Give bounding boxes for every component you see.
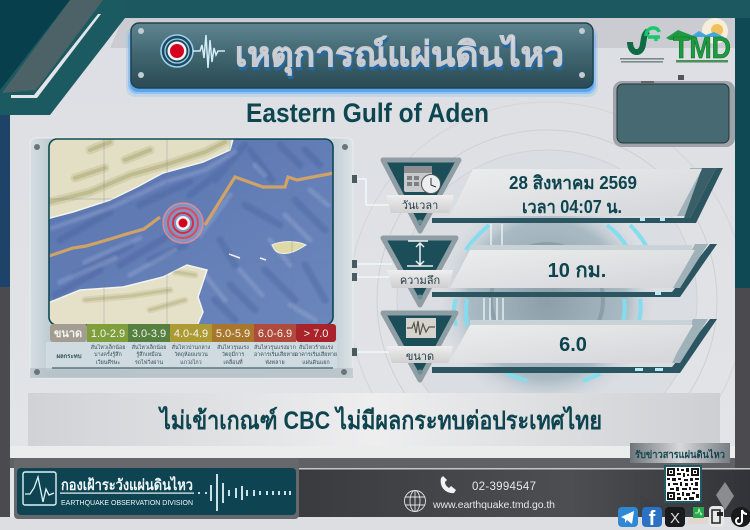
magnitude legend effects row: รู้สึกเหมือน: [136, 351, 162, 358]
panel: map glass frame: [30, 138, 353, 378]
magnitude legend colour row: 3.0-3.9: [132, 328, 166, 340]
magnitude legend colour row: [50, 324, 336, 342]
title plate: [126, 23, 598, 97]
icon: chart app: [688, 507, 708, 524]
icon: X: X: [670, 510, 680, 527]
date and time text: [509, 173, 637, 217]
sea floor relief: [52, 145, 328, 320]
epicentre marker: [163, 203, 203, 243]
magnitude legend effects row: สั่นไหวปานกลาง: [172, 343, 211, 351]
magnitude legend effects row: แผ่นดินแยก: [302, 359, 330, 366]
magnitude legend effects row: [52, 343, 337, 368]
magnitude value: 6.0: [559, 334, 587, 356]
icon: telegram: [618, 507, 638, 527]
northern coast relief: [50, 142, 225, 202]
magnitude legend effects row: แกว่งไกว: [180, 359, 202, 366]
info row: magnitude: [383, 313, 717, 380]
earthquake news label: รับข่าวสารแผ่นดินไหว: [635, 448, 725, 461]
magnitude legend colour row: > 7.0: [304, 328, 328, 340]
icon: globe: [404, 490, 426, 512]
magnitude legend effects row: บางครั้งรู้สึก: [94, 350, 122, 358]
contact details: [404, 476, 555, 512]
magnitude legend colour row: 6.0-6.9: [258, 328, 292, 340]
division name: EARTHQUAKE OBSERVATION DIVISION: [61, 498, 193, 507]
location heading: Eastern Gulf of Aden: [246, 98, 489, 128]
value panel: [449, 325, 693, 363]
division name: [60, 475, 194, 507]
label: date: [386, 195, 454, 213]
icon: seismograph monitor badge: [383, 313, 456, 380]
magnitude legend effects row: วัตถุห้อยแขวน: [174, 351, 208, 358]
icon: sound wave: [198, 474, 290, 511]
info row: depth: [383, 238, 717, 305]
icon: seismograph box: [23, 472, 56, 505]
icon: telephone: [441, 476, 456, 493]
magnitude legend effects row: สั่นไหวรุนแรงมาก: [254, 343, 296, 351]
magnitude legend effects row: รถไฟวิ่งผ่าน: [135, 358, 163, 366]
icon: seismic target: [161, 35, 225, 68]
background concentric rings: [349, 102, 745, 498]
vertical connector lines: [484, 224, 503, 325]
icon: mobile phone: [709, 506, 724, 527]
blank status panel: [613, 75, 735, 147]
label: magnitude: [387, 346, 453, 363]
magnitude legend effects row: สั่นไหวเล็กน้อย: [91, 343, 125, 351]
division badge: [14, 458, 299, 519]
icon: facebook: f: [649, 508, 656, 530]
earthquake news label: [630, 443, 730, 463]
date and time text: 28 สิงหาคม 2569: [509, 173, 637, 193]
CBC alert banner: [28, 393, 720, 446]
icon: calendar and clock badge: [383, 160, 459, 231]
icon: depth arrow badge: [383, 238, 456, 305]
magnitude legend effects row: เวียนศีรษะ: [96, 359, 120, 366]
website: www.earthquake.tmd.go.th: [432, 499, 555, 511]
depth value: 10 กม.: [548, 260, 606, 282]
epicentre map: [48, 139, 334, 326]
row frame: bars: [432, 168, 723, 223]
logo: DG: [620, 28, 664, 63]
magnitude legend effects row: อาคารเริ่มเสียหาย: [254, 350, 296, 358]
QR code: [664, 465, 702, 503]
tectonic ridge line: [49, 173, 334, 256]
CBC alert banner: ไม่เข้าเกณฑ์ CBC ไม่มีผลกระทบต่อประเทศไทย: [157, 405, 602, 435]
magnitude legend effects row: วัตถุมีการ: [222, 351, 244, 358]
magnitude legend colour row: 1.0-2.9: [91, 328, 125, 340]
footer bar: [0, 446, 750, 530]
magnitude legend colour row: 5.0-5.9: [216, 328, 250, 340]
division name: กองเฝ้าระวังแผ่นดินไหว: [61, 475, 193, 494]
label: magnitude: ขนาด: [406, 351, 434, 363]
magnitude legend effects row: เคลื่อนที่: [223, 358, 243, 366]
magnitude legend effects row: ผลกระทบ: [56, 353, 82, 360]
date and time text: เวลา 04:07 น.: [522, 197, 622, 217]
phone number: 02-3994547: [472, 481, 536, 493]
magnitude legend colour row: ขนาด: [54, 328, 82, 340]
magnitude legend colour row: 4.0-4.9: [174, 328, 208, 340]
logo: TMD: [666, 18, 731, 65]
value panel: [450, 169, 702, 216]
title text: เหตุการณ์แผ่นดินไหว: [235, 34, 564, 76]
label: depth: ความลึก: [400, 275, 440, 287]
southern coast relief: [85, 272, 195, 310]
label: depth: [387, 270, 453, 288]
label: date: วันเวลา: [402, 200, 438, 212]
info row: date and time: [383, 160, 723, 231]
social icons: [618, 506, 750, 530]
magnitude legend effects row: สั่นไหวรุนแรง: [217, 343, 249, 351]
logo: TMD: TMD: [673, 30, 731, 65]
magnitude legend effects row: สั่นไหวเล็กน้อย: [132, 343, 166, 351]
magnitude legend effects row: อาคารเริ่มเสียหาย: [295, 350, 337, 358]
magnitude legend effects row: พังทลาย: [265, 359, 285, 366]
connectors from map to info rows: [352, 175, 392, 356]
icon: tiktok: [731, 507, 750, 527]
value panel: [450, 250, 695, 288]
magnitude legend effects row: สั่นไหวร้ายแรง: [299, 343, 334, 351]
title text: เหตุการณ์แผ่นดินไหว: [236, 37, 565, 79]
